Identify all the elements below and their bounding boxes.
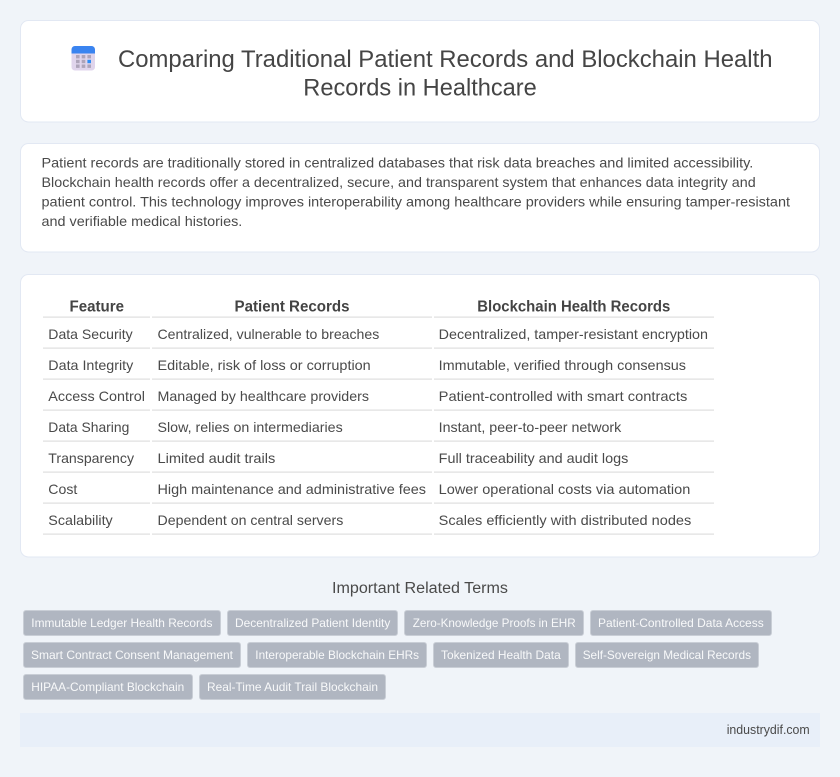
row: Data Security: Data Security xyxy=(48,326,133,342)
row: Access Control: Patient-controlled with smart contracts xyxy=(439,388,687,404)
row: Data Integrity: Editable, risk of loss or corruption xyxy=(158,357,371,373)
row: Data Integrity: Data Integrity xyxy=(48,357,133,373)
row: Data Sharing: Instant, peer-to-peer network xyxy=(439,419,622,435)
panel: intro paragraph xyxy=(20,144,820,252)
tag xyxy=(24,610,220,636)
footer: industrydif.com xyxy=(727,723,810,737)
tag xyxy=(24,642,240,668)
tag xyxy=(228,610,398,636)
text block: intro: Patient records are traditionally stored in centralized databases that risk data breaches and limited accessibility. xyxy=(42,154,753,170)
tag xyxy=(24,674,192,700)
table header xyxy=(43,298,714,318)
footer xyxy=(20,713,820,747)
row: Data Security: Decentralized, tamper-resistant encryption xyxy=(439,326,708,342)
title xyxy=(118,46,772,102)
row: Data Sharing xyxy=(43,419,714,442)
text block: intro: patient control. This technology improves interoperability among healthcare providers while ensuring tamper-resistant xyxy=(42,193,790,209)
row: Cost: Lower operational costs via automation xyxy=(439,481,690,497)
row: Scalability: Scalability xyxy=(48,512,113,528)
tag xyxy=(404,610,584,636)
table header: Blockchain Health Records xyxy=(477,298,670,315)
row: Cost: High maintenance and administrative fees xyxy=(158,481,426,497)
row: Data Integrity: Immutable, verified through consensus xyxy=(439,357,686,373)
row: Transparency xyxy=(43,450,714,473)
tag: Interoperable Blockchain EHRs xyxy=(255,648,419,662)
row: Scalability xyxy=(43,512,714,535)
tag: HIPAA-Compliant Blockchain xyxy=(31,680,184,694)
row: Access Control xyxy=(43,388,714,411)
row: Data Security: Centralized, vulnerable to breaches xyxy=(158,326,379,342)
row: Transparency: Limited audit trails xyxy=(158,450,275,466)
table header: Feature xyxy=(70,298,124,315)
heading: related terms: Important Related Terms xyxy=(332,580,508,597)
row: Data Sharing: Data Sharing xyxy=(48,419,129,435)
row: Transparency: Transparency xyxy=(48,450,134,466)
row: Scalability: Scales efficiently with distributed nodes xyxy=(439,512,691,528)
tag: Self-Sovereign Medical Records xyxy=(583,648,751,662)
tag xyxy=(576,642,758,668)
text block: intro: and verifiable medical histories. xyxy=(42,213,242,229)
panel: comparison table xyxy=(20,274,820,557)
tag: Decentralized Patient Identity xyxy=(235,616,390,630)
row: Data Security xyxy=(43,326,714,349)
text block: intro xyxy=(42,154,790,229)
row: Cost: Cost xyxy=(48,481,77,497)
row: Cost xyxy=(43,481,714,504)
tag: Smart Contract Consent Management xyxy=(31,648,234,662)
row: Scalability: Dependent on central servers xyxy=(158,512,343,528)
icon: calendar grid xyxy=(72,46,95,70)
text block: intro: Blockchain health records offer a decentralized, secure, and transparent system that enhances data integrity and xyxy=(42,174,756,190)
tag xyxy=(200,674,386,700)
row: Data Sharing: Slow, relies on intermediaries xyxy=(158,419,343,435)
row: Access Control: Access Control xyxy=(48,388,145,404)
row: Transparency: Full traceability and audit logs xyxy=(439,450,628,466)
tag xyxy=(434,642,568,668)
title: Comparing Traditional Patient Records and Blockchain Health xyxy=(118,46,772,73)
tag xyxy=(590,610,772,636)
tag xyxy=(248,642,426,668)
row: Data Integrity xyxy=(43,357,714,380)
title: Records in Healthcare xyxy=(303,74,537,102)
table header: Patient Records xyxy=(234,298,350,315)
tag: Patient-Controlled Data Access xyxy=(598,616,764,630)
tag group: related terms xyxy=(24,610,772,700)
tag: Zero-Knowledge Proofs in EHR xyxy=(413,616,576,630)
row: Access Control: Managed by healthcare providers xyxy=(158,388,369,404)
tag: Tokenized Health Data xyxy=(441,648,561,662)
tag: Real-Time Audit Trail Blockchain xyxy=(207,680,378,694)
panel: title header xyxy=(20,20,820,122)
tag: Immutable Ledger Health Records xyxy=(31,616,212,630)
